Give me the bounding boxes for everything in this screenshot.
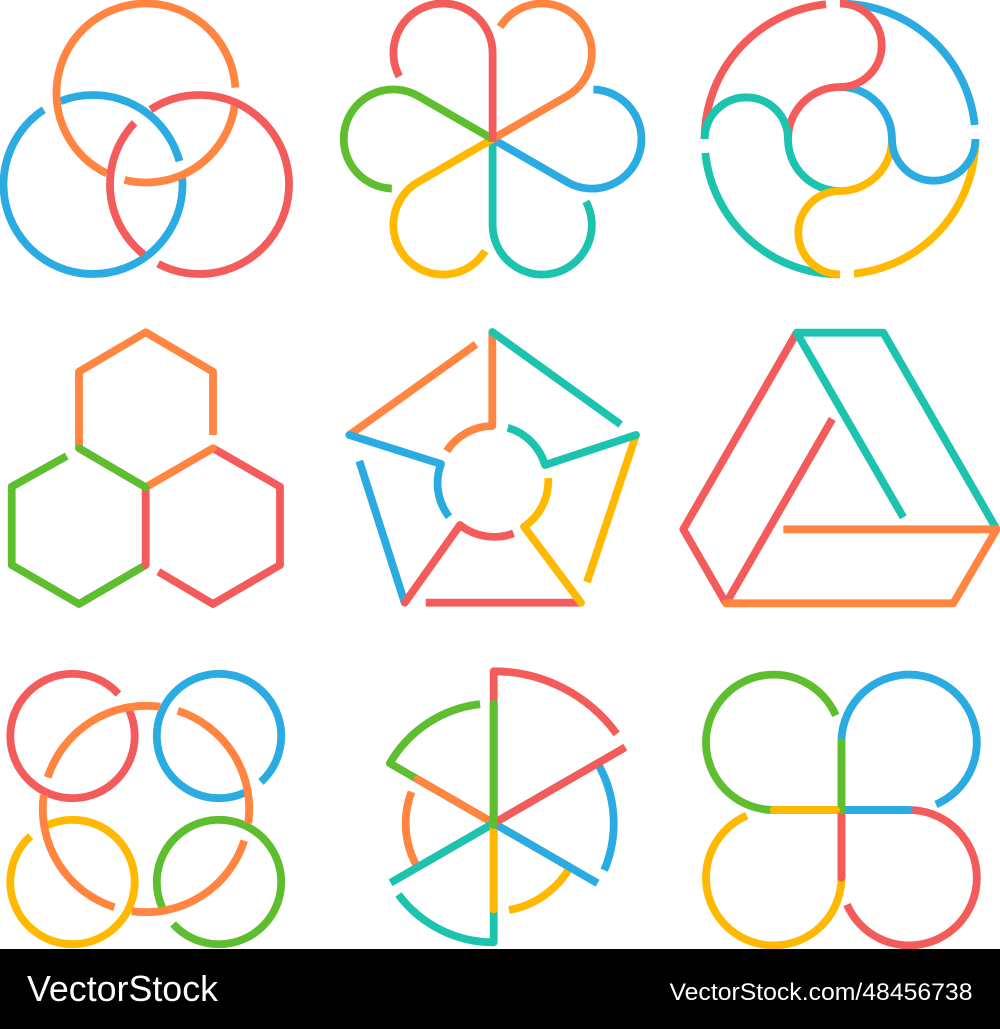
blue petal <box>493 53 660 207</box>
icon: three hexagons <box>12 332 280 604</box>
green hexagon upper edge <box>79 448 146 487</box>
red petal <box>393 3 493 142</box>
red ring <box>74 59 325 310</box>
teal overlap arc <box>705 97 788 141</box>
teal triangle band <box>793 329 997 529</box>
orange hexagon <box>79 332 213 487</box>
teal petal <box>493 139 592 275</box>
green small ring <box>137 800 301 964</box>
red triangle band <box>683 333 832 603</box>
red hexagon <box>146 448 280 604</box>
green sector <box>390 703 494 823</box>
teal pentagon segment <box>488 328 640 465</box>
green hexagon lower edges <box>12 456 146 604</box>
icon: four leaf clover <box>706 675 977 945</box>
yellow swirl segment <box>798 139 975 274</box>
yellow pentagon segment <box>524 435 636 607</box>
footer brand name: VectorStock <box>27 968 219 1009</box>
blue swirl segment <box>840 4 975 181</box>
blue leaf <box>841 675 977 810</box>
yellow sector <box>490 823 570 913</box>
blue ring <box>0 69 209 300</box>
red sector <box>494 671 625 823</box>
red small ring <box>0 654 155 818</box>
footer image id: VectorStock.com/48456738 <box>670 979 972 1006</box>
icon: circular swirl <box>705 4 975 274</box>
red swirl segment <box>705 4 882 139</box>
yellow stem <box>774 806 836 814</box>
red pentagon segment <box>401 525 581 607</box>
orange triangle band <box>722 529 997 607</box>
teal sector <box>391 823 494 942</box>
yellow small ring <box>0 800 155 964</box>
green spoke <box>490 703 498 825</box>
footer bar <box>0 949 1000 1029</box>
yellow leaf <box>706 810 841 945</box>
blue stem <box>846 806 909 814</box>
orange pentagon segment <box>349 332 492 451</box>
orange petal <box>443 0 610 139</box>
icon: pie sectors <box>390 671 625 942</box>
orange sector <box>406 775 494 867</box>
icon: four rings around a circle <box>0 654 301 964</box>
green petal <box>326 71 493 225</box>
orange large ring <box>16 679 276 939</box>
blue pentagon segment <box>345 431 449 603</box>
green leaf <box>706 675 841 810</box>
green stem <box>838 742 845 810</box>
orange ring <box>45 0 247 194</box>
icon: three interlocking circles <box>0 0 325 310</box>
icon: segmented pentagon <box>345 328 640 607</box>
teal swirl segment <box>705 97 840 274</box>
icon: impossible triangle <box>683 329 997 607</box>
blue small ring <box>137 654 301 818</box>
blue sector <box>494 763 614 883</box>
red stem <box>838 816 845 878</box>
yellow petal <box>375 139 542 293</box>
red leaf <box>841 810 977 945</box>
icon: six petal flower <box>326 0 660 293</box>
